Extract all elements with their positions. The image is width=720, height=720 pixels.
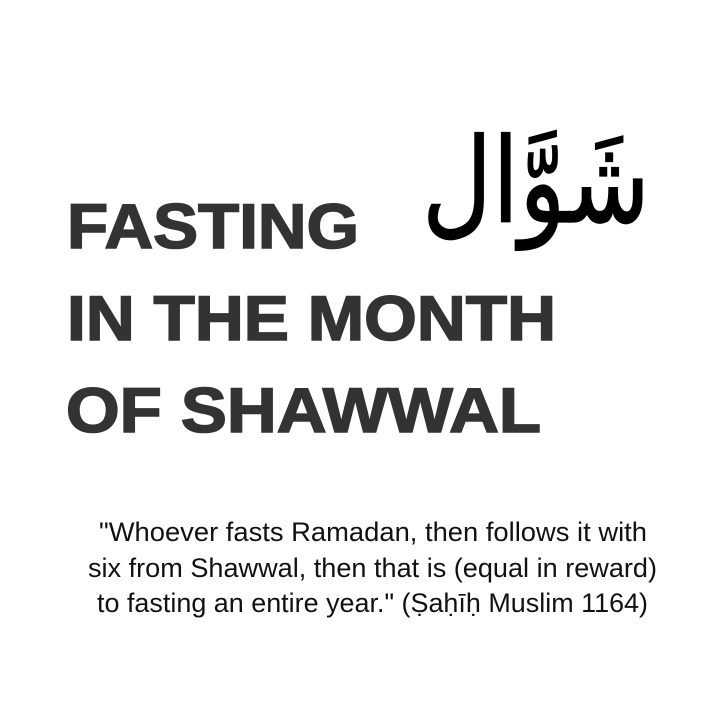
title line 3: OF SHAWWAL	[66, 376, 541, 446]
arabic calligraphy: Shawwal: شَوَّال	[422, 114, 650, 250]
title line 1: FASTING	[67, 192, 359, 262]
quote line 2: six from Shawwal, then that is (equal in reward)	[88, 553, 657, 583]
hadith quote	[88, 517, 657, 618]
quote line 1: "Whoever fasts Ramadan, then follows it with	[99, 517, 647, 547]
title line 2: IN THE MONTH	[67, 284, 556, 354]
title	[66, 192, 556, 446]
quote line 3: to fasting an entire year." (Ṣaḥīḥ Muslim 1164)	[97, 588, 648, 618]
